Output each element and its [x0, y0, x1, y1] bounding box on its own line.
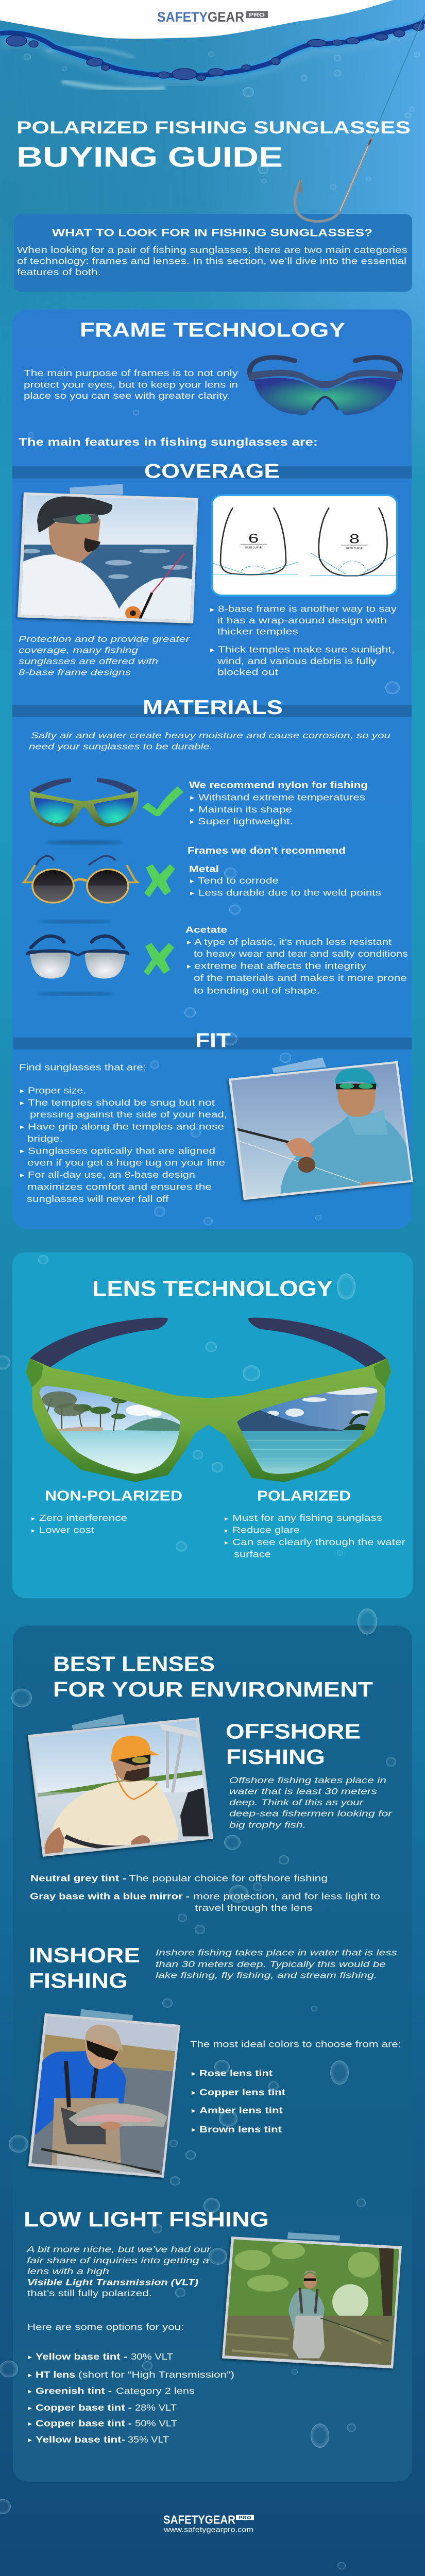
heading: lens technology: LENS TECHNOLOGY [92, 1277, 333, 1301]
main title [16, 117, 411, 173]
footer logo: www.safetygearpro.com [163, 2526, 253, 2534]
label: polarized: POLARIZED [257, 1488, 351, 1504]
text: materials intro: need your sunglasses to be durable. [29, 741, 213, 751]
text: acetate: to heavy wear and tear and salty conditions [194, 949, 408, 959]
heading: inshore fishing: INSHORE [29, 1944, 140, 1967]
text: nylon recommendation: Withstand extreme temperatures [198, 792, 365, 802]
text: low light options: Greenish tint - [36, 2386, 112, 2396]
text: ideal colors: Copper lens tint [199, 2088, 285, 2097]
text: purpose of frames: The main purpose of frames is to not only [24, 368, 238, 378]
label: non-polarized: Zero interference [39, 1513, 127, 1523]
text: low light options: Copper base tint - [36, 2403, 132, 2413]
text: ideal colors: Amber lens tint [199, 2106, 283, 2115]
text: purpose of frames: protect your eyes, but to keep your lens in [24, 380, 238, 389]
text: fit list: maximizes comfort and ensures the [27, 1182, 212, 1192]
text: low light description: A bit more niche, but we’ve had our [26, 2245, 211, 2254]
text: materials intro: Salty air and water create heavy moisture and cause corrosion, so you [31, 731, 390, 740]
icon: fishing hook and line [295, 13, 425, 222]
band: materials [12, 696, 412, 719]
text: low light options: Yellow base tint - [36, 2352, 127, 2362]
text: low light options: (short for “High Transmission”) [78, 2370, 234, 2380]
logo: SAFETY [157, 10, 208, 25]
text: coverage bullets: thicker temples [217, 626, 298, 636]
text: coverage caption [19, 634, 190, 677]
text: low light options [27, 2323, 234, 2445]
shadow: acetate sunglasses [37, 992, 114, 996]
text: acetate: extreme heat affects the integrity [194, 961, 366, 971]
band: fit [13, 1029, 412, 1052]
band: coverage [12, 460, 412, 482]
text: offshore description: deep-sea fishermen looking for [229, 1809, 393, 1818]
text: acetate: of the materials and makes it more prone [194, 973, 407, 983]
text: coverage bullets: Thick temples make sure sunlight, [218, 645, 395, 654]
text: low light options: Copper base tint - [36, 2419, 132, 2428]
text: nylon recommendation [189, 780, 368, 826]
text: purpose of frames: place so you can see with greater clarity. [24, 391, 230, 401]
text: inshore description: lake fishing, fly fishing, and stream fishing. [156, 1970, 377, 1980]
glasses: 8 base: 8 [349, 532, 360, 546]
text: nylon recommendation: Super lightweight. [198, 817, 293, 826]
text: coverage bullets: 8-base frame is another way to say [218, 604, 397, 614]
photo: low light angler [222, 2232, 402, 2368]
text: fit list: pressing against the side of your head, [30, 1110, 227, 1120]
text: low light options: Yellow base tint- [36, 2435, 125, 2445]
text: offshore tints: Gray base with a blue mirror - [30, 1891, 190, 1901]
glasses: 8 base [311, 507, 397, 575]
text: coverage caption: Protection and to provide greater [19, 634, 190, 644]
text: fit list: Sunglasses optically that are aligned [28, 1146, 215, 1156]
text: coverage bullets: blocked out [217, 668, 278, 677]
text: offshore description [229, 1775, 393, 1829]
text: coverage bullets: it has a wrap-around design with [217, 616, 387, 625]
text: inshore description [156, 1947, 397, 1980]
shadow: round sunglasses [40, 920, 112, 924]
text: materials intro [29, 731, 390, 751]
main title: POLARIZED FISHING SUNGLASSES [16, 117, 411, 137]
text: low light description: that’s still fully polarized. [27, 2289, 152, 2298]
label: non-polarized: NON-POLARIZED [45, 1488, 182, 1504]
heading: best lenses [53, 1653, 373, 1701]
text: metal: Less durable due to the weld points [198, 888, 381, 897]
text: ideal colors: Rose lens tint [199, 2069, 273, 2078]
logo: PRO [249, 12, 265, 18]
card: base curve diagram [212, 495, 397, 596]
shadow: green sunglasses [45, 840, 123, 845]
icon: acetate sunglasses [26, 936, 129, 978]
text: ideal colors: The most ideal colors to choose from are: [190, 2039, 401, 2049]
photo: inshore angler with trout [26, 2009, 180, 2181]
text: low light options: HT lens [36, 2370, 75, 2380]
text: low light options: 50% VLT [135, 2419, 177, 2428]
text: ideal colors [190, 2039, 401, 2134]
label: polarized: Reduce glare [232, 1525, 300, 1535]
label: non-polarized [31, 1488, 182, 1535]
logo [157, 10, 268, 25]
text: low light options: 30% VLT [131, 2352, 173, 2362]
text: acetate: A type of plastic, it’s much less resistant [194, 937, 392, 947]
text: low light options: 35% VLT [128, 2435, 169, 2445]
text: fit list: Proper size. [28, 1086, 86, 1095]
text: offshore tints [30, 1873, 380, 1913]
text: acetate [185, 925, 408, 995]
label: polarized: Must for any fishing sunglass [232, 1513, 382, 1523]
text: low light description: lens with a high [27, 2266, 109, 2276]
heading: inshore fishing: FISHING [29, 1969, 128, 1993]
text: offshore description: water that is least 30 meters [229, 1786, 377, 1796]
panel: what to look for: of technology: frames and lenses. In this section, we’ll dive into the essential [17, 256, 406, 266]
icon: green check [142, 786, 183, 816]
heading: frames not recommended: Frames we don’t recommend [188, 845, 346, 856]
text: offshore tints: The popular choice for offshore fishing [129, 1873, 328, 1883]
text: offshore description: big trophy fish. [229, 1820, 306, 1829]
footer logo: SAFETYGEAR [163, 2514, 235, 2527]
text: low light description: fair share of inquiries into getting a [27, 2256, 209, 2265]
glasses: 8 base: BASE CURVE [346, 547, 363, 550]
footer logo: PRO [239, 2515, 251, 2520]
panel: best lenses [13, 1625, 412, 2482]
text: main features: The main features in fishing sunglasses are: [19, 435, 318, 448]
label: polarized: surface [234, 1549, 271, 1559]
text: low light description [26, 2245, 211, 2298]
icon: green nylon sunglasses [30, 778, 138, 827]
icon: green cross [144, 864, 175, 897]
label: polarized: Can see clearly through the water [232, 1537, 405, 1547]
text: purpose of frames [24, 368, 238, 401]
text: offshore tints: travel through the lens [195, 1903, 313, 1913]
icon: green cross [144, 943, 174, 975]
text: coverage bullets [210, 604, 397, 677]
glasses: 6 base: 6 [248, 531, 259, 546]
text: fit list: sunglasses will never fall off [27, 1194, 169, 1204]
heading: low light fishing: LOW LIGHT FISHING [24, 2208, 269, 2231]
text: low light description: Visible Light Transmission (VLT) [27, 2277, 198, 2287]
text: coverage caption: 8-base frame designs [19, 668, 131, 677]
text: low light options: Category 2 lens [116, 2386, 195, 2396]
heading: best lenses: FOR YOUR ENVIRONMENT [53, 1678, 373, 1701]
text: fit list: even if you get a huge tug on your line [27, 1158, 225, 1167]
photo: angler on boat [15, 484, 201, 623]
text: acetate: Acetate [185, 925, 227, 935]
panel: frame technology [12, 310, 417, 1229]
label: polarized [225, 1488, 405, 1559]
text: coverage caption: sunglasses are offered with [19, 656, 158, 666]
photo: fly fisherman [227, 1057, 417, 1204]
text: acetate: to bending out of shape. [194, 986, 320, 995]
text: fit list [19, 1062, 227, 1204]
text: offshore description: Offshore fishing takes place in [229, 1775, 386, 1785]
heading: inshore fishing [29, 1944, 140, 1993]
heading: offshore fishing: OFFSHORE [226, 1720, 361, 1743]
logo: GEAR [208, 10, 244, 25]
heading: frame technology: FRAME TECHNOLOGY [80, 319, 345, 341]
white wave header [0, 0, 393, 39]
panel: what to look for [14, 214, 412, 292]
panel: what to look for: When looking for a pair of fishing sunglasses, there are two main categories [17, 245, 407, 255]
text: metal: Tend to corrode [198, 876, 279, 886]
text: low light options: Here are some options for you: [27, 2323, 184, 2332]
text: offshore tints: more protection, and for less light to [193, 1891, 380, 1901]
text: nylon recommendation: We recommend nylon for fishing [189, 780, 368, 791]
water surface ribbon [0, 21, 425, 89]
text: offshore description: deep. Think of this as your [229, 1798, 364, 1807]
right lens: polarized [237, 1386, 378, 1474]
band: fit: FIT [195, 1029, 231, 1052]
text: low light options: 28% VLT [135, 2403, 177, 2413]
text: offshore tints: Neutral grey tint - [30, 1873, 126, 1883]
text: metal: Metal [189, 865, 219, 874]
text: fit list: For all-day use, an 8-base design [28, 1170, 195, 1180]
photo: offshore angler [26, 1714, 216, 1859]
glasses: 6 base [213, 507, 298, 574]
main title: BUYING GUIDE [16, 141, 283, 173]
glasses: 6 base: BASE CURVE [245, 547, 262, 549]
icon: wrap sunglasses [249, 358, 402, 415]
heading: offshore fishing [226, 1720, 361, 1769]
panel: what to look for: WHAT TO LOOK FOR IN FISHING SUNGLASSES? [52, 227, 372, 239]
text: fit list: bridge. [27, 1134, 63, 1144]
label: non-polarized: Lower cost [39, 1525, 94, 1535]
text: fit list: Find sunglasses that are: [19, 1062, 146, 1072]
heading: best lenses: BEST LENSES [53, 1653, 215, 1676]
band: materials: MATERIALS [143, 696, 283, 719]
text: fit list: Have grip along the temples and nose [28, 1122, 224, 1131]
text: metal [189, 865, 381, 897]
text: coverage bullets: wind, and various debris is fully [217, 656, 377, 666]
text: inshore description: than 30 meters deep. Typically this would be [156, 1959, 386, 1969]
band: coverage: COVERAGE [144, 460, 280, 482]
text: coverage caption: coverage, many fishing [19, 645, 138, 655]
left lens: non-polarized [39, 1386, 180, 1473]
footer logo [163, 2514, 254, 2534]
text: ideal colors: Brown lens tint [199, 2125, 282, 2134]
icon: round metal sunglasses [24, 856, 138, 903]
text: nylon recommendation: Maintain its shape [198, 805, 292, 815]
panel: lens technology [12, 1252, 413, 1598]
text: fit list: The temples should be snug but not [28, 1098, 215, 1108]
illustration: large green sunglasses with lenses [26, 1318, 391, 1482]
heading: offshore fishing: FISHING [226, 1745, 325, 1769]
panel: what to look for: features of both. [17, 267, 101, 277]
text: inshore description: Inshore fishing takes place in water that is less [156, 1947, 397, 1957]
